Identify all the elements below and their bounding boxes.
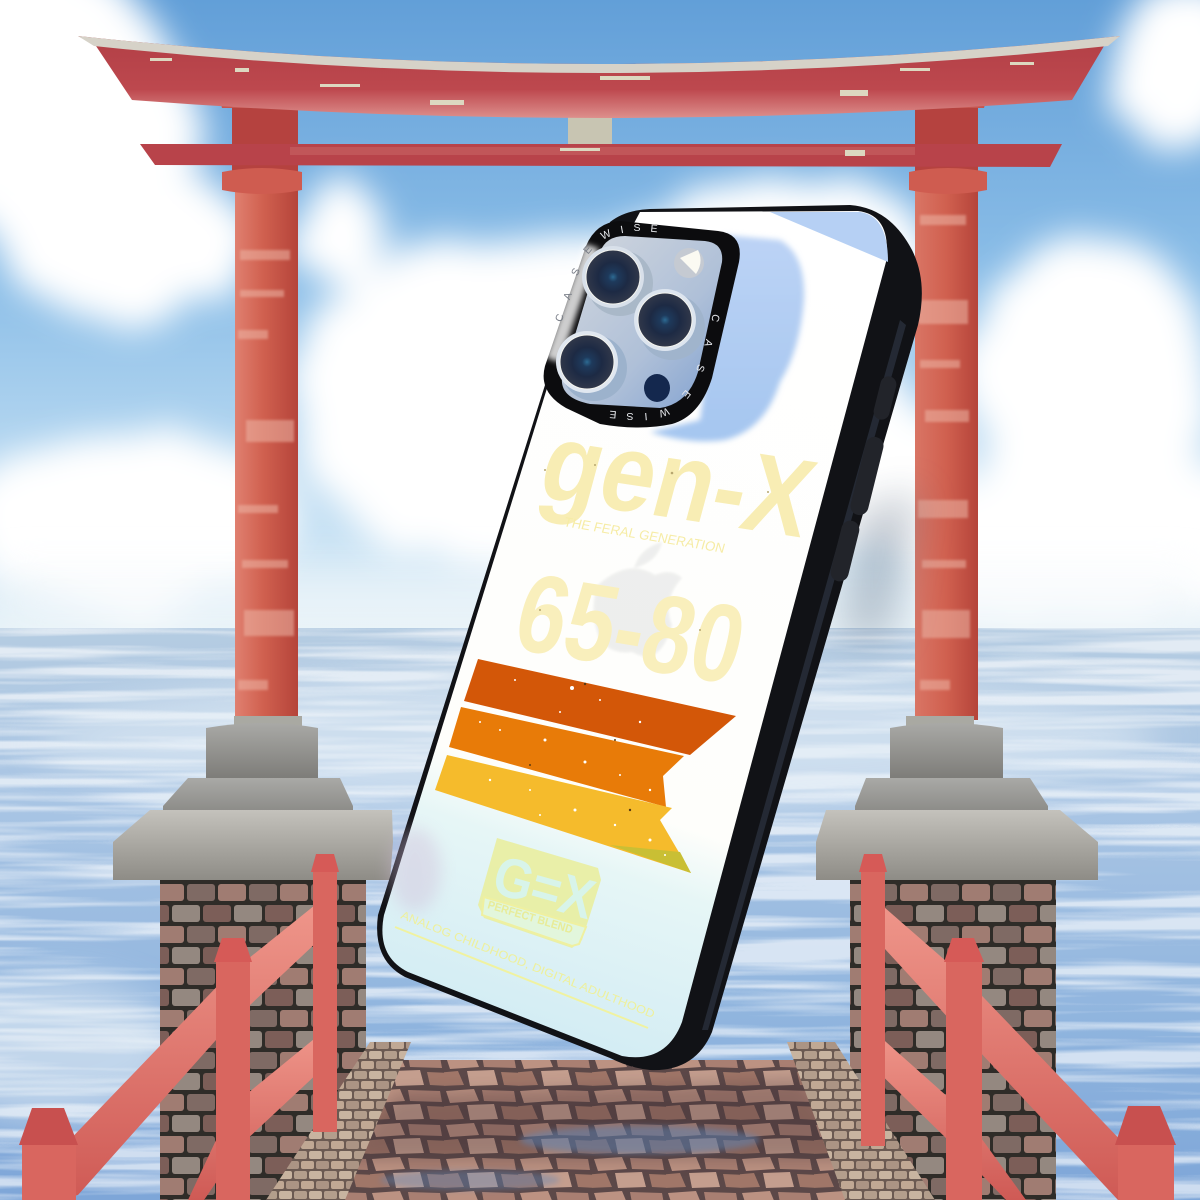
camera module [544,221,740,428]
tagline: THE FERAL GENERATION [562,514,727,556]
brand ring: E [581,243,595,257]
phone shadow on water [840,490,920,640]
brand ring: S [569,266,583,278]
brand ring: E [609,408,617,420]
post collars [216,86,990,108]
right pillar [909,100,987,720]
iridescent tint [389,828,441,912]
brand ring: C [708,313,722,324]
lens top [582,246,653,316]
brand ring: S [626,410,634,422]
camera glass [562,236,722,408]
brand ring: A [561,291,575,301]
camera reflection [650,235,804,441]
birth years: 65-80 [504,550,757,707]
left railing [19,854,339,1200]
top beam highlight [78,36,1120,73]
left stone base [113,716,393,1200]
underline [395,927,648,1028]
right railing [859,854,1176,1200]
brand ring: S [633,222,641,234]
water [0,628,1200,1200]
right stone base [816,716,1098,1200]
apple logo [593,542,682,656]
horizon haze [0,570,1200,635]
clouds [0,0,1200,625]
case side sheen [702,320,906,1030]
brand ring: A [701,338,715,348]
tagline bottom: ANALOG CHILDHOOD, DIGITAL ADULTHOOD [399,910,656,1021]
top beam [78,36,1120,118]
microphone [644,374,670,402]
phone [377,205,922,1070]
brand ring: E [679,387,693,401]
left pillar [222,100,302,720]
sky [0,0,1200,630]
title speckles [539,464,769,631]
gen-x title: gen-X [529,399,827,561]
flash [674,248,704,278]
tie beam [140,144,1062,167]
lens bottom [556,331,627,401]
brand ring: I [620,224,624,236]
stripes [435,659,736,873]
brand ring: W [599,227,613,243]
centre strut [568,104,612,144]
brand ring [553,222,722,422]
brand ring: I [644,410,648,422]
brand ring: W [657,405,671,419]
sky reflection top right [770,212,888,262]
phone case body [377,205,922,1070]
perfect blend badge: PERFECT BLEND [486,899,574,936]
side buttons [829,375,898,583]
ring glare [553,246,592,360]
torii gate [78,36,1120,720]
paint chips [150,58,1034,156]
stone walkway [266,1042,935,1200]
lens right [634,289,705,360]
speckles [479,679,666,856]
back plate [382,211,887,1057]
brand ring: C [553,312,567,323]
perfect blend badge: G=X [487,843,602,931]
brand ring: E [650,223,658,235]
brand ring: S [693,362,707,374]
